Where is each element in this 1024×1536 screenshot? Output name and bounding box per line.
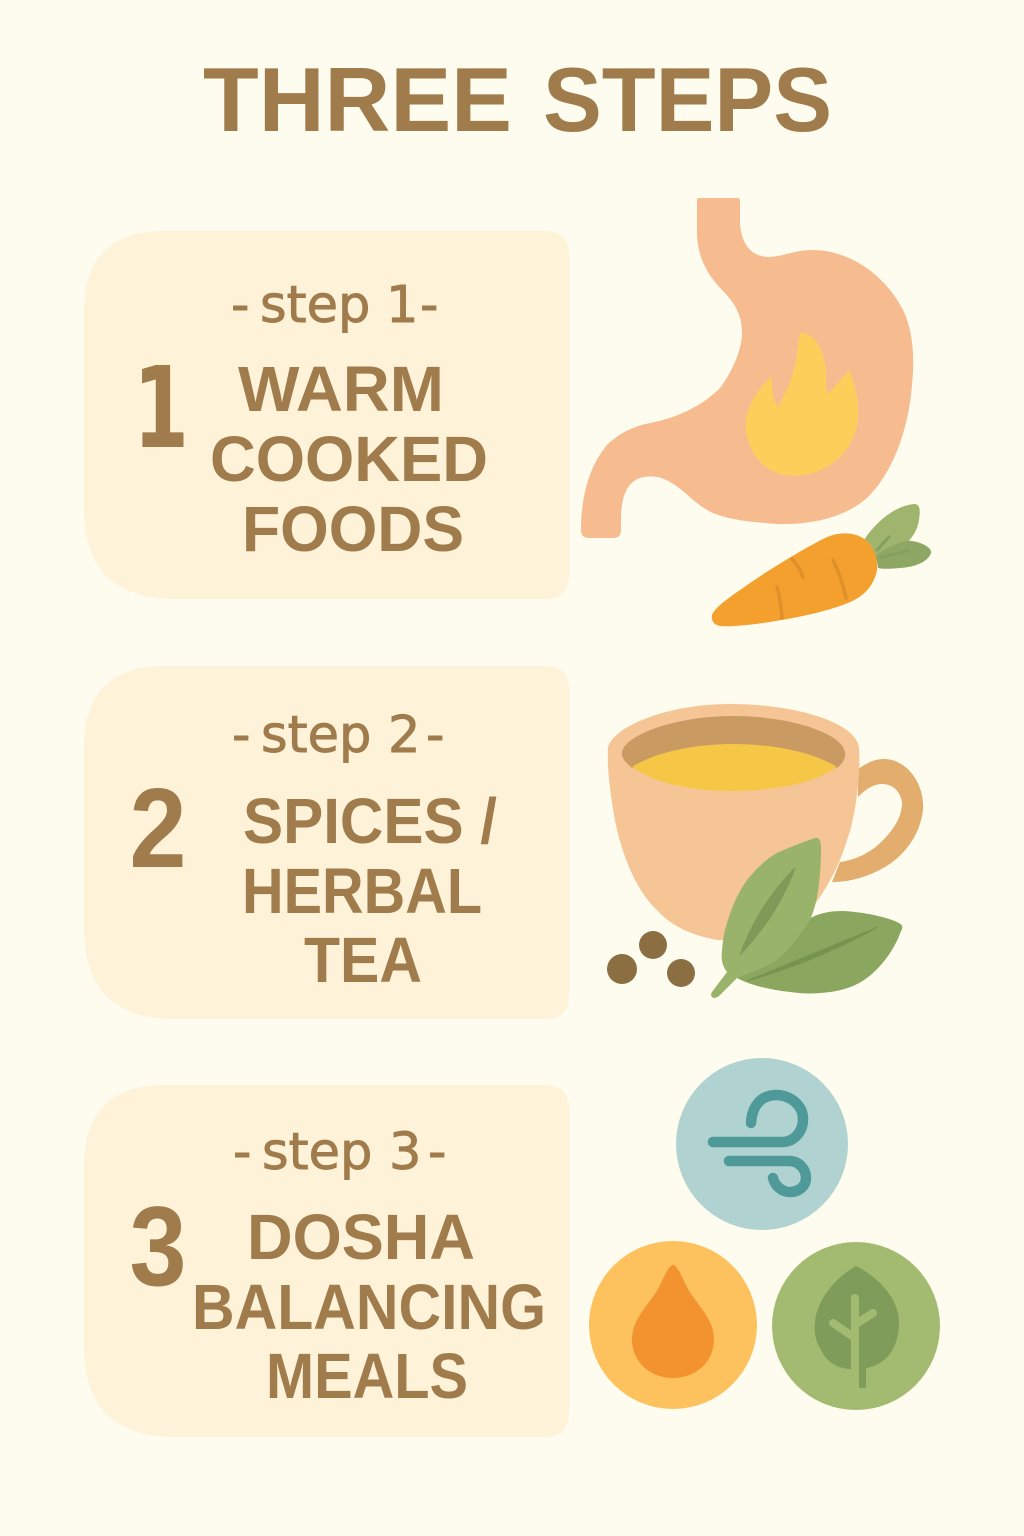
step 2 heading bbox=[242, 785, 497, 996]
step 2 heading: HERBAL bbox=[242, 855, 482, 927]
step 3 number: 3 bbox=[130, 1183, 186, 1309]
back leaf bbox=[737, 911, 902, 994]
step 3 label: 3 bbox=[389, 1123, 421, 1182]
carrot body bbox=[712, 533, 877, 626]
step 1 label: step bbox=[260, 276, 370, 335]
step 1 label: - bbox=[231, 276, 249, 335]
step 3 label: - bbox=[428, 1123, 446, 1182]
icon: pitta drop circle bbox=[589, 1241, 757, 1409]
step 1 heading: COOKED bbox=[210, 423, 488, 495]
step 1 heading: WARM bbox=[238, 353, 444, 425]
step 1 label: 1 bbox=[386, 276, 418, 335]
front leaf bbox=[711, 838, 821, 998]
step 1 number: 1 bbox=[133, 344, 189, 474]
panel: step 1 bbox=[84, 231, 569, 599]
step 2 number: 2 bbox=[130, 765, 186, 891]
step 3 heading: BALANCING bbox=[192, 1271, 546, 1343]
step 1 heading: FOODS bbox=[242, 493, 464, 565]
title: THREE bbox=[203, 50, 512, 151]
step 3 heading: MEALS bbox=[266, 1340, 468, 1412]
peppercorns bbox=[607, 954, 637, 984]
flame bbox=[746, 333, 858, 476]
cup body bbox=[608, 704, 859, 940]
step 3 heading bbox=[192, 1201, 546, 1412]
panel: step 3 bbox=[84, 1085, 569, 1437]
step 2 label: step bbox=[261, 706, 371, 765]
step 1 heading bbox=[210, 353, 488, 565]
icon: carrot bbox=[712, 504, 931, 626]
step 2 label: 2 bbox=[388, 706, 420, 765]
icon: kapha leaf circle bbox=[772, 1242, 940, 1410]
step 1 label: - bbox=[420, 276, 438, 335]
step 2 heading: TEA bbox=[304, 924, 422, 996]
step 3 heading: DOSHA bbox=[247, 1201, 475, 1273]
icon: vata air circle bbox=[676, 1058, 848, 1230]
icon: tea cup with leaves and peppercorns bbox=[607, 704, 923, 998]
step 3 label: - bbox=[233, 1123, 251, 1182]
panel: step 2 bbox=[84, 666, 569, 1019]
carrot leaves bbox=[864, 504, 920, 566]
title: STEPS bbox=[543, 50, 832, 151]
title bbox=[203, 50, 832, 151]
cup interior bbox=[622, 716, 845, 768]
step 3 label: step bbox=[262, 1123, 372, 1182]
step 2 label: - bbox=[426, 706, 444, 765]
step 2 label: - bbox=[232, 706, 250, 765]
icon: stomach with flame bbox=[581, 198, 913, 538]
step 2 heading: SPICES / bbox=[243, 785, 497, 857]
tea surface bbox=[632, 744, 837, 791]
cup handle bbox=[832, 759, 923, 882]
